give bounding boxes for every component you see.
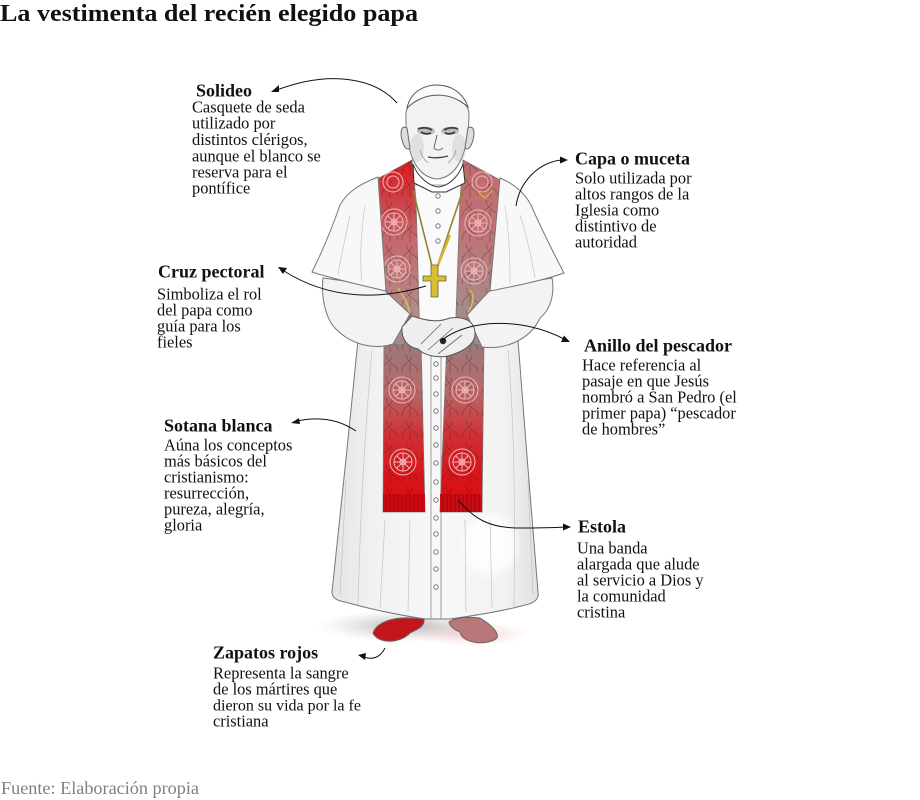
text: Anillo: nombró a San Pedro (el — [582, 388, 737, 407]
chest and inner shirt — [412, 185, 462, 330]
cape — [312, 177, 386, 291]
text: Cruz: fieles — [157, 333, 192, 352]
face — [417, 127, 459, 163]
text: Capa: distintivo de — [575, 217, 656, 236]
arrow: Capa — [516, 156, 568, 206]
text: Cruz: Cruz pectoral — [158, 262, 264, 282]
arrow: Sotana — [291, 418, 356, 431]
callout: Estola — [458, 500, 704, 622]
arrow: Anillo — [442, 323, 570, 342]
text: Cruz: guía para los — [157, 317, 241, 336]
title: La vestimenta del recién elegido papa — [0, 1, 418, 27]
hands and fisherman's ring — [402, 316, 475, 357]
text: Estola: al servicio a Dios y — [577, 571, 704, 590]
text: Zapatos: Representa la sangre — [213, 664, 349, 683]
chest buttons — [436, 194, 440, 243]
upper stole left — [379, 160, 420, 345]
text: Estola: cristina — [577, 603, 626, 622]
text: Estola: la comunidad — [577, 587, 666, 606]
arrow: Zapatos — [358, 648, 385, 660]
pectoral cross — [413, 190, 463, 297]
text: Sotana: resurrección, — [164, 484, 249, 503]
text: Sotana: gloria — [164, 516, 203, 535]
white cassock — [332, 340, 538, 619]
text: Estola: alargada que alude — [577, 555, 700, 574]
text: Anillo: Anillo del pescador — [584, 336, 732, 356]
callout: Capa o muceta — [516, 149, 692, 252]
text: Cruz: del papa como — [157, 301, 253, 320]
source note: Fuente: Elaboración propia — [1, 778, 199, 798]
text: Solideo: Casquete de seda — [192, 98, 306, 117]
text: Estola: Estola — [578, 517, 626, 537]
zucchetto — [407, 85, 468, 108]
text: Solideo: Solideo — [196, 81, 252, 101]
text: Solideo: reserva para el — [192, 163, 288, 182]
text: Sotana: Aúna los conceptos — [164, 436, 292, 455]
floor shadow — [317, 610, 493, 642]
text: Sotana: Sotana blanca — [164, 416, 273, 436]
arrow: Estola — [458, 500, 571, 530]
text: Zapatos: dieron su vida por la fe — [213, 698, 361, 715]
sleeves — [323, 278, 410, 346]
text: Solideo: distintos clérigos, — [192, 130, 308, 149]
callout: Cruz pectoral — [157, 262, 426, 352]
callout: Anillo del pescador — [442, 323, 737, 439]
text: Sotana: más básicos del — [164, 452, 267, 471]
callout: Sotana blanca — [164, 416, 356, 535]
text: Sotana: pureza, alegría, — [164, 500, 265, 519]
callout: Solideo — [192, 79, 397, 198]
collar — [413, 164, 465, 192]
upper stole right — [455, 160, 500, 345]
text: Anillo: primer papa) “pescador — [582, 404, 736, 423]
text: Zapatos: cristiana — [213, 712, 269, 731]
text: Solideo: pontífice — [192, 179, 250, 198]
illustration: pope in vestments — [312, 85, 564, 646]
head — [406, 90, 469, 179]
text: Capa: Iglesia como — [575, 201, 659, 220]
cassock buttons — [434, 362, 438, 589]
text: Cruz: Simboliza el rol — [157, 285, 262, 304]
text: Solideo: utilizado por — [192, 114, 276, 133]
arrow: Solideo — [271, 79, 397, 103]
text: Capa: autoridad — [575, 233, 637, 252]
text: Anillo: pasaje en que Jesús — [582, 372, 709, 391]
text: Sotana: cristianismo: — [164, 468, 249, 487]
text: Capa: Solo utilizada por — [575, 169, 692, 188]
arrow: Cruz — [278, 267, 426, 295]
text: Capa: Capa o muceta — [575, 149, 690, 169]
lower stole left — [383, 340, 425, 512]
red shoes — [373, 617, 497, 643]
text: Zapatos: de los mártires que — [213, 680, 337, 699]
lower stole right — [440, 340, 484, 512]
text: Capa: altos rangos de la — [575, 185, 690, 204]
text: Estola: Una banda — [577, 539, 648, 558]
callout: Zapatos rojos — [213, 643, 385, 731]
text: Solideo: aunque el blanco se — [192, 147, 321, 166]
text: Anillo: de hombres” — [582, 420, 665, 439]
text: Anillo: Hace referencia al — [582, 356, 702, 375]
text: Zapatos: Zapatos rojos — [213, 643, 318, 663]
